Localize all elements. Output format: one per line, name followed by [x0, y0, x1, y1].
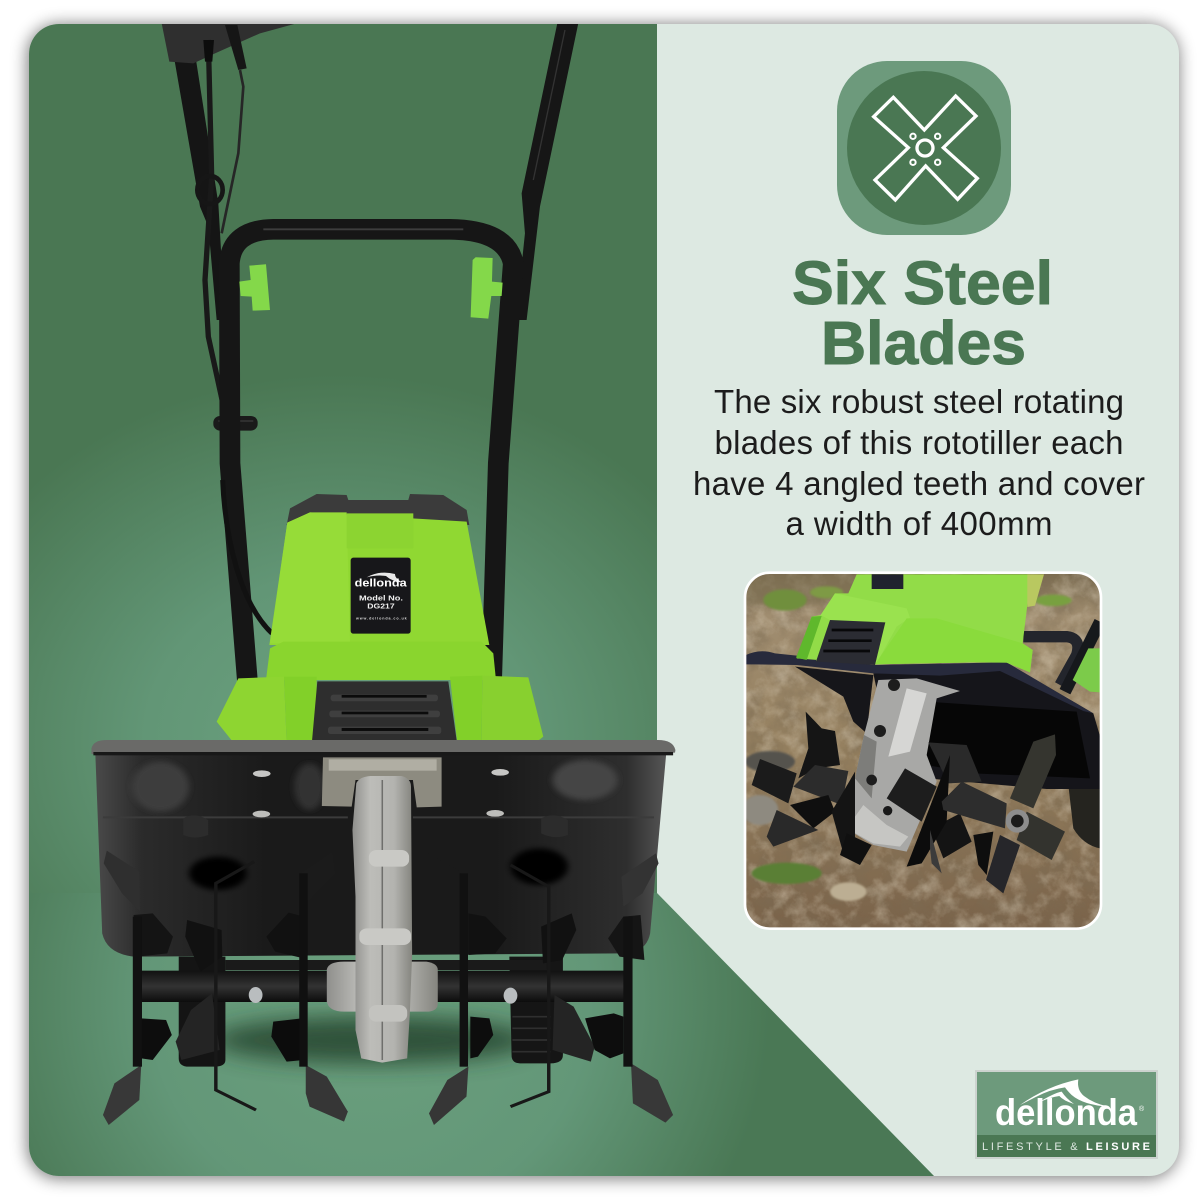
tine 1: [103, 851, 173, 1125]
icon: blade badge: [837, 61, 1011, 235]
logo wordmark: dellonda: [995, 1092, 1137, 1133]
air vent: [312, 681, 457, 745]
logo registered mark: ®: [1139, 1105, 1145, 1113]
gearbox hub: [327, 962, 438, 1012]
tine 4: [429, 874, 506, 1125]
left handle and cables: [162, 24, 294, 431]
body text: blades of this rototiller each: [714, 424, 1124, 461]
icon background: [837, 61, 1011, 235]
ground shadow: [212, 1016, 532, 1064]
model label: DG217: [367, 602, 395, 611]
grass patches: [752, 586, 1072, 884]
housing green side wings: [217, 677, 287, 743]
right handle: [516, 23, 578, 320]
right rotor blade: [942, 734, 1065, 893]
body text: a width of 400mm: [786, 505, 1052, 542]
housing green lower: [266, 642, 496, 680]
wheel: [1068, 785, 1100, 848]
logo wave: [1020, 1079, 1108, 1107]
icon: green right knob: [471, 257, 503, 319]
axle: [137, 971, 629, 1002]
model label: Model No.: [359, 593, 403, 602]
logo footer band: [977, 1135, 1156, 1157]
panel: green floor wedge: [29, 893, 935, 1177]
heading: [793, 259, 1050, 365]
green body: [797, 574, 1033, 672]
tine 5: [510, 865, 595, 1107]
shield: [795, 667, 873, 733]
middle rotor blades: [887, 742, 993, 875]
panel: left green wall: [29, 24, 657, 894]
icon: green left knob: [239, 264, 270, 311]
logo tagline: LIFESTYLE & LEISURE: [982, 1141, 1150, 1153]
bolts: [249, 987, 263, 1003]
icon: cross blade: [874, 96, 977, 200]
tine 2: [176, 862, 256, 1110]
gearbox bracket: [322, 757, 442, 807]
heading: Six Steel: [792, 249, 1053, 317]
rototiller product image: [91, 23, 675, 1125]
housing green upper: [269, 512, 489, 645]
tine 6: [585, 853, 673, 1123]
gearbox column: [352, 776, 412, 1063]
body text: [693, 383, 1145, 542]
icon circle: [847, 71, 1001, 225]
model label: www.dellonda.co.uk: [355, 616, 408, 620]
model label: dellonda: [355, 578, 407, 590]
U-shaped handle bar: [229, 229, 513, 680]
tub body: [95, 753, 666, 957]
left rotor blades: [752, 712, 872, 865]
body text: The six robust steel rotating: [714, 383, 1124, 420]
logo: dellonda lifestyle & leisure: [975, 1070, 1158, 1159]
photo: tiller in soil: [742, 573, 1101, 929]
photo border: [745, 573, 1101, 929]
logo panel: [977, 1072, 1156, 1157]
body text: have 4 angled teeth and cover: [693, 465, 1145, 502]
tine 3: [266, 852, 348, 1122]
heading: Blades: [821, 309, 1026, 377]
model label: [351, 558, 411, 634]
soil background: [746, 574, 1100, 928]
tub rim: [91, 740, 675, 754]
vent panel: [816, 620, 885, 665]
motor housing: [217, 480, 543, 745]
tub lighting: [132, 762, 189, 812]
rear handle: [1023, 637, 1078, 685]
logo border: [975, 1070, 1158, 1159]
power cable: [223, 480, 272, 633]
housing dark top: [287, 494, 469, 525]
rear wheels: [179, 957, 225, 1067]
stones: [745, 751, 795, 772]
tiller mechanism: [91, 740, 675, 1125]
aluminium gearbox: [846, 678, 960, 852]
